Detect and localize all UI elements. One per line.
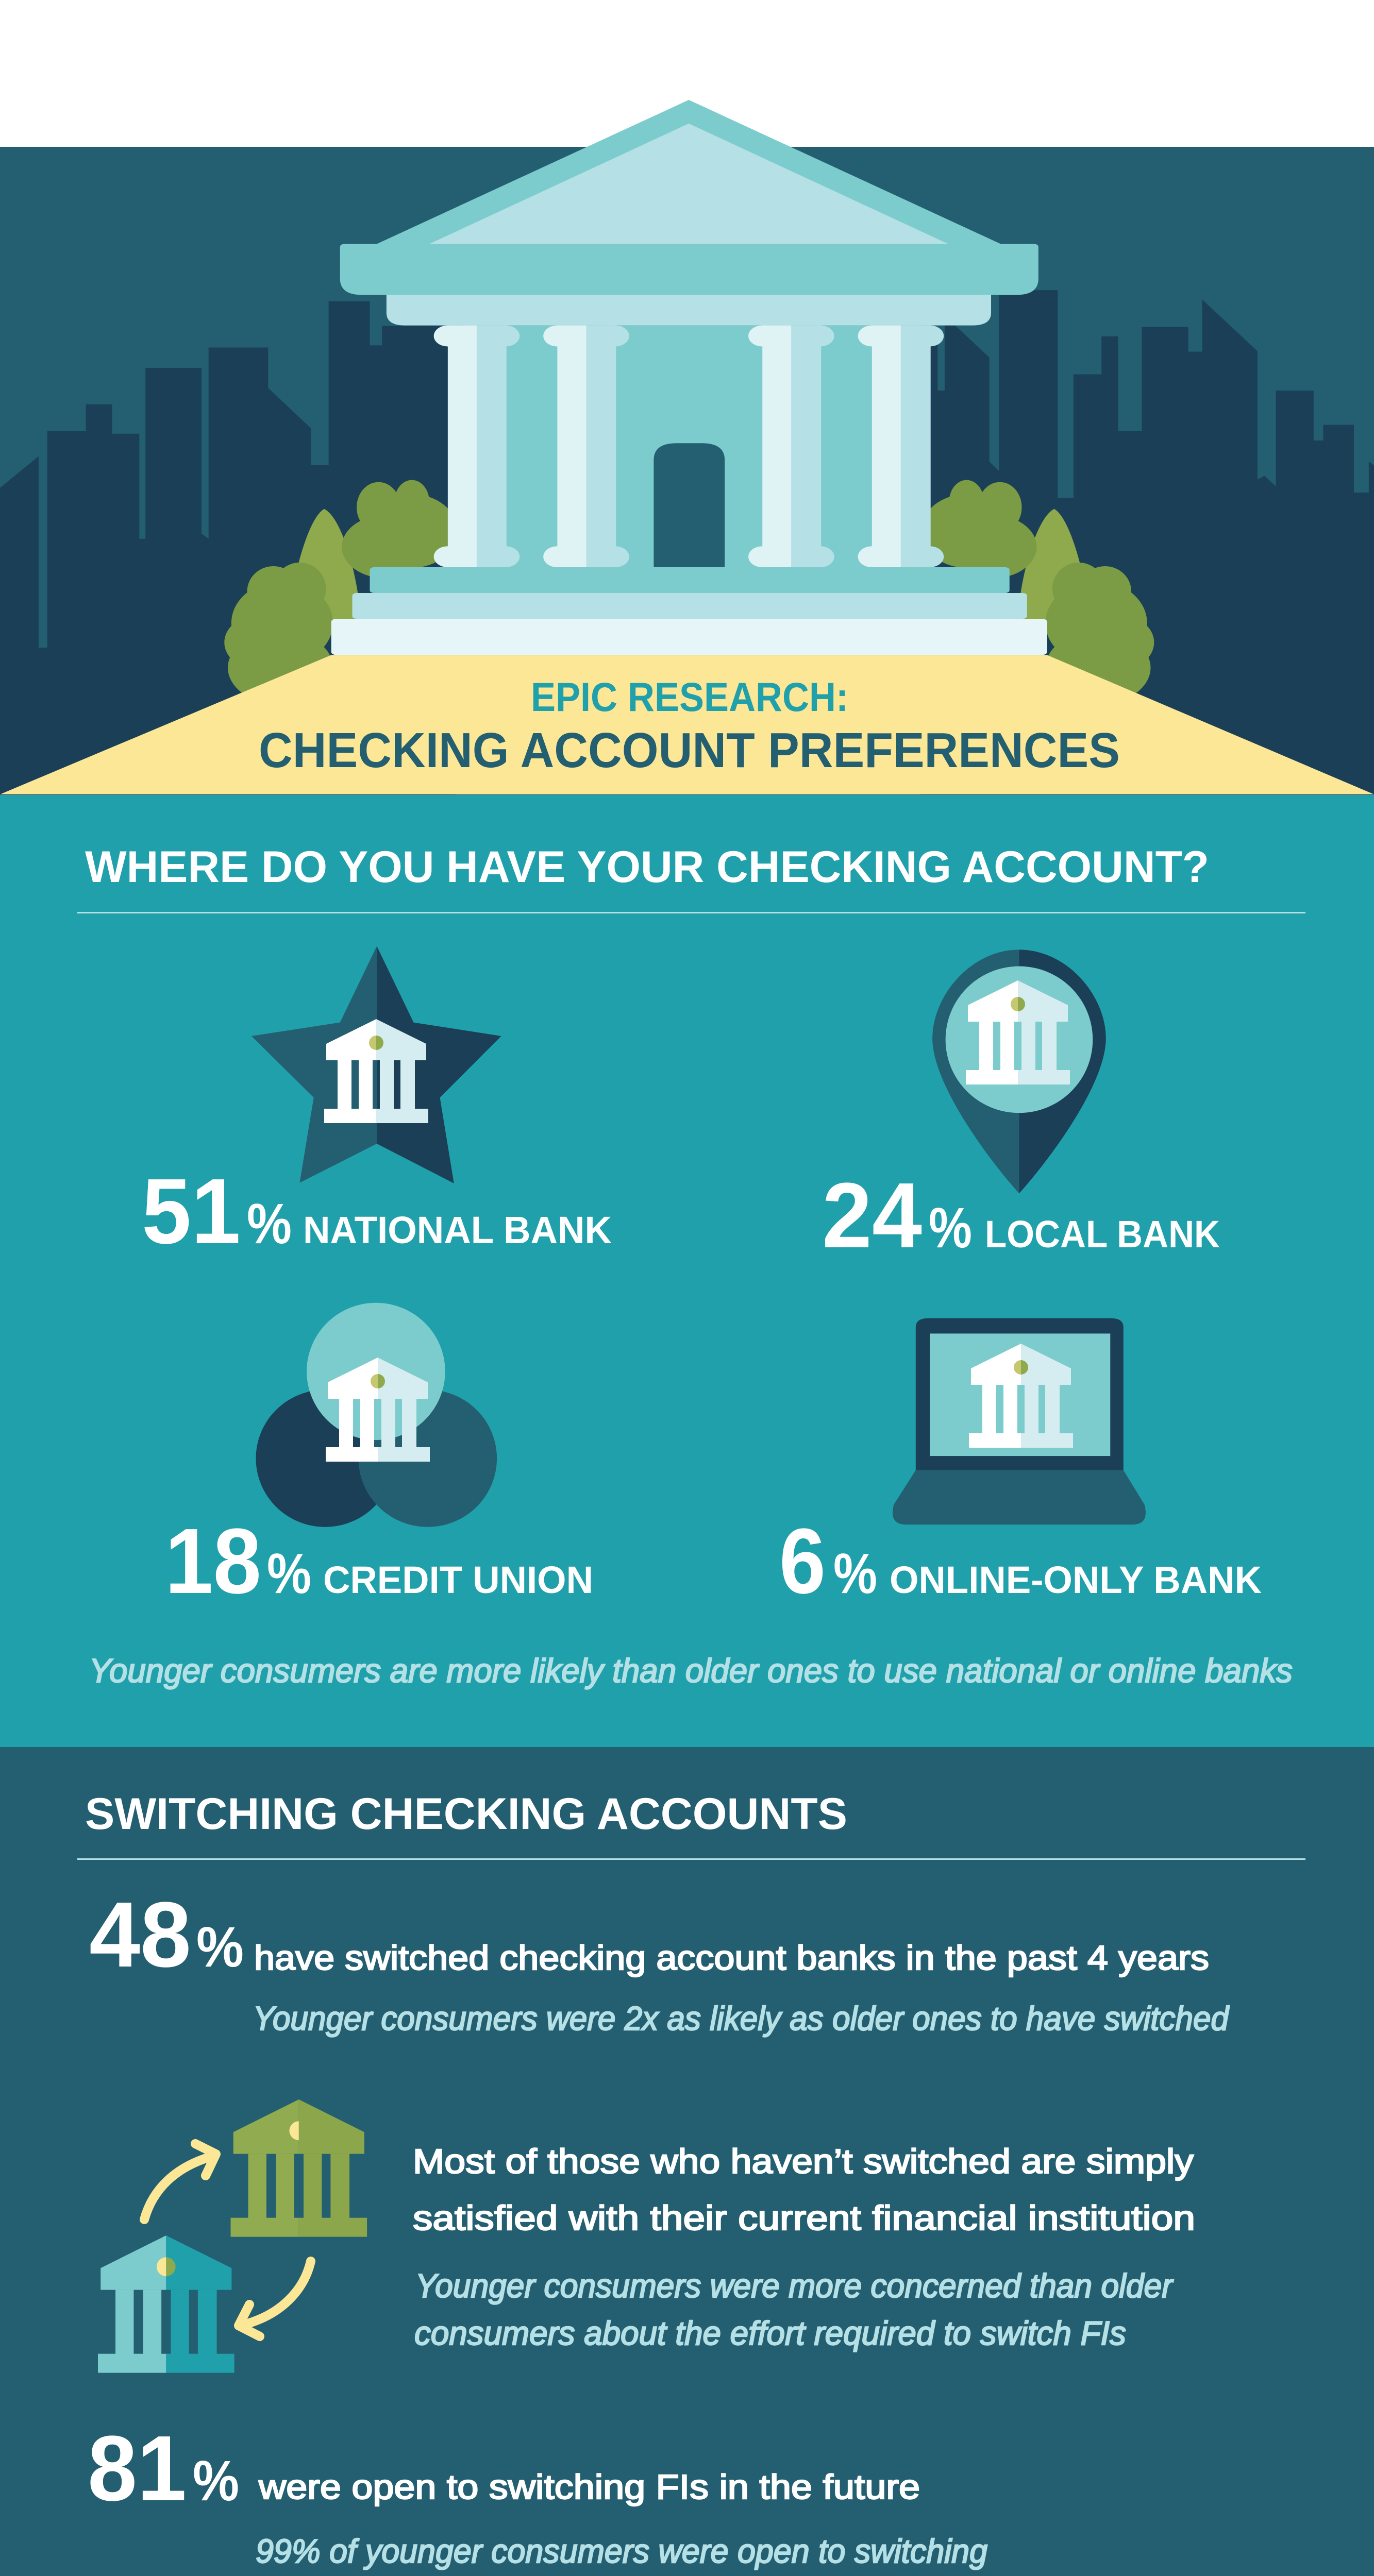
stat: credit union: CREDIT UNION [323, 1558, 593, 1601]
text: satisfied: satisfied with their current financial institution [413, 2199, 1195, 2238]
icon: overlapping circles with bank [256, 1303, 497, 1527]
stat: local bank [822, 1164, 1220, 1267]
wall [464, 326, 920, 567]
title [259, 674, 1120, 778]
city skyline [0, 290, 1374, 795]
stat: credit union [165, 1510, 593, 1613]
text: satisfied: consumers about the effort required to switch FIs [414, 2314, 1126, 2352]
stat: 81% open to switching: were open to switching FIs in the future [258, 2468, 920, 2506]
title: CHECKING ACCOUNT PREFERENCES [259, 723, 1120, 778]
text: satisfied: Most of those who haven’t switched are simply [413, 2142, 1194, 2181]
path [0, 655, 1374, 794]
icon: star with bank [252, 946, 501, 1183]
heading: WHERE DO YOU HAVE YOUR CHECKING ACCOUNT? [85, 842, 1209, 892]
stat: 48% switched: Younger consumers were 2x as likely as older ones to have switched [253, 1999, 1230, 2037]
arrows [144, 2144, 311, 2336]
stat: national bank: NATIONAL BANK [303, 1209, 612, 1251]
stat: online-only bank: ONLINE-ONLY BANK [890, 1558, 1262, 1601]
stat: 81% open to switching: % [193, 2449, 239, 2513]
stat: online-only bank: % [833, 1542, 877, 1605]
stat: 48% switched: have switched checking account banks in the past 4 years [254, 1939, 1209, 1977]
stat: online-only bank [779, 1510, 1262, 1613]
stat: 48% switched: % [196, 1916, 244, 1979]
steps [331, 567, 1047, 655]
shrubs [224, 480, 1154, 704]
stat: online-only bank: 6 [779, 1510, 826, 1613]
icon: map pin with bank [932, 950, 1106, 1193]
stat: national bank [142, 1160, 612, 1263]
text: satisfied [413, 2142, 1195, 2352]
stat: credit union: 18 [165, 1510, 261, 1613]
entablature [340, 244, 1038, 326]
panel: where do you have your checking account [0, 795, 1374, 1747]
heading: SWITCHING CHECKING ACCOUNTS [85, 1789, 847, 1839]
stat: 81% open to switching: 81 [88, 2417, 187, 2520]
header panel [0, 100, 1374, 795]
door [654, 443, 725, 567]
roof pediment [377, 100, 1001, 244]
panel: switching checking accounts [0, 1747, 1374, 2576]
stat: 48% switched [89, 1883, 1230, 2037]
stat: 81% open to switching: 99% of younger consumers were open to switching [256, 2532, 987, 2570]
stat: local bank: 24 [822, 1164, 922, 1267]
icon: laptop with bank [893, 1318, 1146, 1524]
text: satisfied: Younger consumers were more concerned than older [415, 2267, 1174, 2304]
illustration: bank building [0, 100, 1374, 794]
title: EPIC RESEARCH: [531, 674, 848, 720]
stat: national bank: 51 [142, 1160, 241, 1263]
stat: local bank: LOCAL BANK [985, 1213, 1220, 1256]
stat: national bank: % [247, 1192, 292, 1256]
icon: switching banks with arrows [98, 2099, 367, 2373]
columns [434, 326, 944, 567]
stat: credit union: % [267, 1542, 311, 1605]
stat: local bank: % [929, 1196, 972, 1260]
stat: 48% switched: 48 [89, 1883, 191, 1987]
stat: 81% open to switching [88, 2417, 987, 2570]
note: Younger consumers are more likely than older ones to use national or online banks [89, 1652, 1293, 1689]
